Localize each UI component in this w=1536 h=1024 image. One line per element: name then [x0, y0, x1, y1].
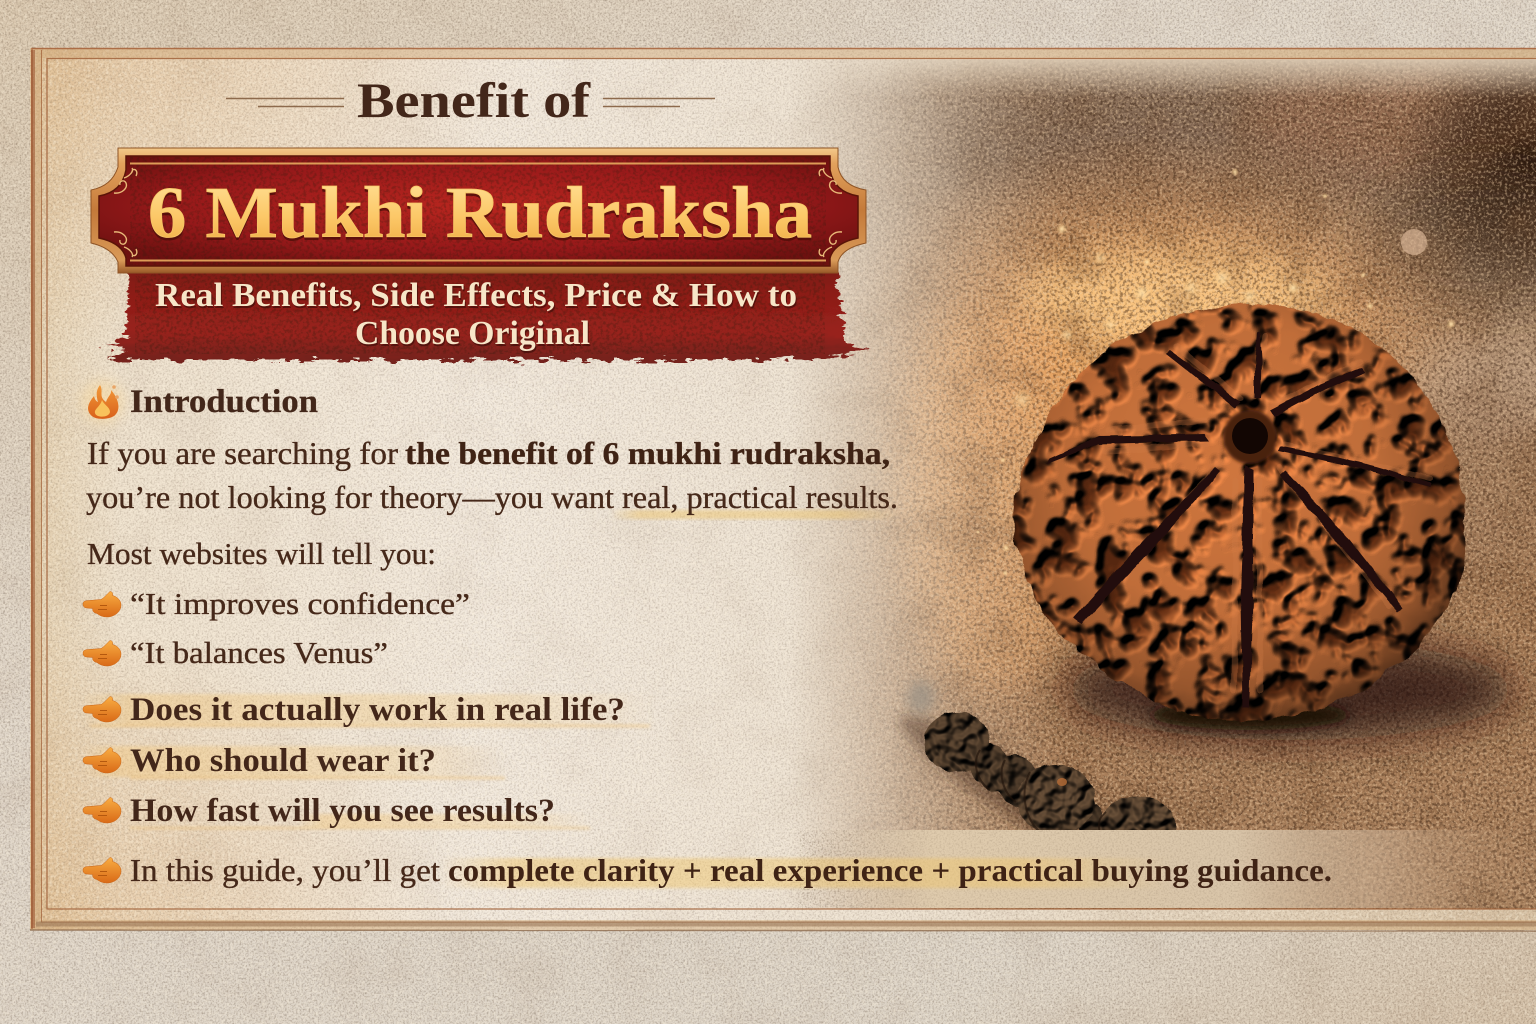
list item: balances Venus: “It balances Venus”: [130, 635, 388, 670]
mala beads at the bottom: [894, 678, 1176, 830]
intro paragraph: the benefit of 6 mukhi rudraksha,: [405, 435, 890, 471]
6 mukhi rudraksha bead: [1014, 305, 1464, 720]
sparkles: [976, 168, 1456, 576]
photo background with glow: [760, 30, 1536, 910]
bead contact shadow: [1065, 640, 1515, 740]
subtitle text: [155, 277, 798, 354]
closing line: complete clarity + real experience + practical buying guidance.: [448, 852, 1332, 888]
bead segment grooves: [1046, 332, 1431, 708]
bottom text band: [30, 830, 1536, 908]
highlight: practical results: [610, 510, 900, 519]
subtitle text: Real Benefits, Side Effects, Price & How to: [155, 277, 797, 314]
plaque title text: 6 Mukhi Rudraksha: [148, 175, 812, 256]
list item: who should wear: Who should wear it?: [130, 743, 436, 779]
icon: flame: [81, 380, 125, 424]
top soft fade of photo: [812, 59, 1536, 96]
section: Introduction heading: [81, 380, 318, 424]
intro paragraph: If you are searching for: [87, 435, 398, 471]
section: Introduction heading: Introduction: [130, 384, 318, 420]
heading: Benefit of: [226, 72, 715, 128]
text: Most websites will tell you: Most websites will tell you:: [87, 536, 436, 571]
title plaque: [91, 148, 866, 273]
list item: improves confidence: “It improves confidence”: [130, 586, 470, 621]
heading: Benefit of: Benefit of: [357, 72, 592, 128]
list item: who should wear: [83, 743, 505, 779]
ribbon: subtitle brush: [102, 268, 870, 360]
subtitle text: Choose Original: [356, 317, 591, 354]
list item: how fast: How fast will you see results?: [130, 793, 555, 829]
plaque corner ornaments: [114, 168, 842, 257]
plaque title text: 6 Mukhi Rudraksha: [148, 172, 812, 253]
subtitle text: Real Benefits, Side Effects, Price & How to: [156, 279, 798, 316]
bead segment ridges: [1092, 336, 1430, 690]
bead central hole: [1223, 410, 1277, 464]
intro paragraph: [86, 435, 900, 519]
list item: does it work: Does it actually work in real life?: [130, 692, 625, 728]
subtitle text: Choose Original: [355, 315, 590, 352]
closing line: In this guide, you’ll get: [130, 852, 440, 888]
intro paragraph: you’re not looking for theory—you want real, practical results.: [86, 479, 898, 515]
closing line: [83, 852, 1332, 888]
